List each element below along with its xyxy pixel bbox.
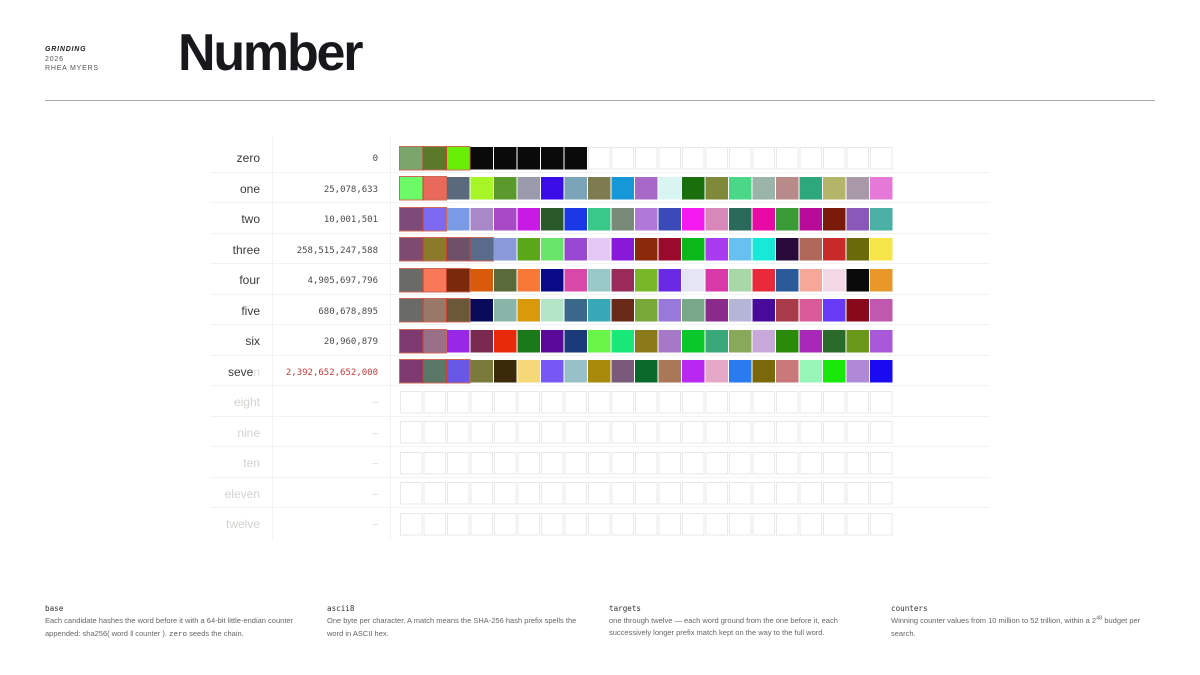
word label: two — [241, 212, 260, 226]
note: targets: targets — [609, 604, 641, 613]
hash swatches — [399, 237, 892, 262]
note: counters: Winning counter values from 10 million to 52 trillion, within a 248 budget per search. — [891, 616, 1140, 638]
word label: five — [241, 304, 260, 318]
counter: 680,678,895 — [318, 307, 378, 317]
counter placeholder: – — [373, 398, 378, 408]
note: targets — [609, 604, 838, 637]
counter placeholder: – — [373, 490, 378, 500]
note: base — [45, 604, 293, 639]
row: zero — [210, 142, 990, 173]
word label: ten — [243, 456, 260, 470]
hash swatches — [399, 207, 892, 232]
row: nine (empty) — [210, 417, 990, 447]
row: eight (empty) — [210, 386, 990, 417]
row: twelve (empty) — [226, 513, 892, 536]
counter: 2,392,652,652,000 — [286, 368, 378, 378]
word label: four — [239, 273, 260, 287]
meta block: series, year, author: 2026 — [45, 56, 64, 62]
row: five — [210, 295, 990, 325]
empty swatches — [400, 482, 892, 504]
meta block: series, year, author: RHEA MYERS — [45, 65, 99, 72]
row: ten (empty) — [210, 447, 990, 478]
counter: 0 — [373, 154, 378, 164]
word label: six — [245, 334, 260, 348]
counter: 25,078,633 — [324, 185, 378, 195]
counter: 258,515,247,588 — [297, 246, 378, 256]
word label: seven — [228, 365, 260, 379]
note: ascii8 — [327, 604, 576, 638]
word label: eight — [234, 395, 260, 409]
row: four — [210, 264, 990, 295]
empty swatches — [400, 452, 892, 474]
word label: twelve — [226, 517, 260, 531]
empty swatches — [400, 391, 892, 414]
hash swatches — [399, 359, 892, 384]
note: base: Each candidate hashes the word before it with a 64-bit little-endian counter appended: sha256( word ‖ counter ). zero seeds the chain. — [45, 616, 293, 639]
counter placeholder: – — [373, 429, 378, 439]
hash swatches — [399, 176, 892, 200]
note: targets: one through twelve — each word ground from the one before it, each successively longer prefix match kept on the way to the full word. — [609, 616, 838, 637]
empty swatches — [400, 513, 892, 536]
word label: three — [233, 243, 260, 257]
hash swatches — [399, 298, 892, 322]
hash swatches — [399, 146, 892, 170]
note: base: base — [45, 604, 63, 613]
word label: nine — [237, 426, 260, 440]
counter placeholder: – — [373, 459, 378, 469]
counter: 4,905,697,796 — [308, 276, 378, 286]
meta block: series, year, author — [45, 46, 99, 72]
row: seven (in progress) — [210, 356, 990, 386]
note: ascii8: ascii8 — [327, 604, 354, 613]
row: three — [210, 234, 990, 264]
counter: 20,960,879 — [324, 337, 378, 347]
title: Number — [178, 24, 361, 82]
hash swatches — [399, 268, 892, 292]
note: counters — [891, 604, 1140, 638]
word label: eleven — [225, 487, 260, 501]
word label: zero — [237, 151, 260, 165]
note: ascii8: One byte per character. A match means the SHA-256 hash prefix spells the word in ASCII hex. — [327, 616, 576, 638]
counter placeholder: – — [373, 520, 378, 530]
counter: 10,001,501 — [324, 215, 378, 225]
word label: one — [240, 182, 260, 196]
row: two — [210, 203, 990, 234]
note: counters: counters — [891, 604, 928, 613]
row: one — [210, 173, 990, 203]
meta block: series, year, author: GRINDING — [45, 46, 86, 53]
hash swatches — [399, 329, 892, 354]
empty swatches — [400, 421, 892, 444]
row: eleven (empty) — [210, 478, 990, 508]
row: six — [210, 325, 990, 356]
